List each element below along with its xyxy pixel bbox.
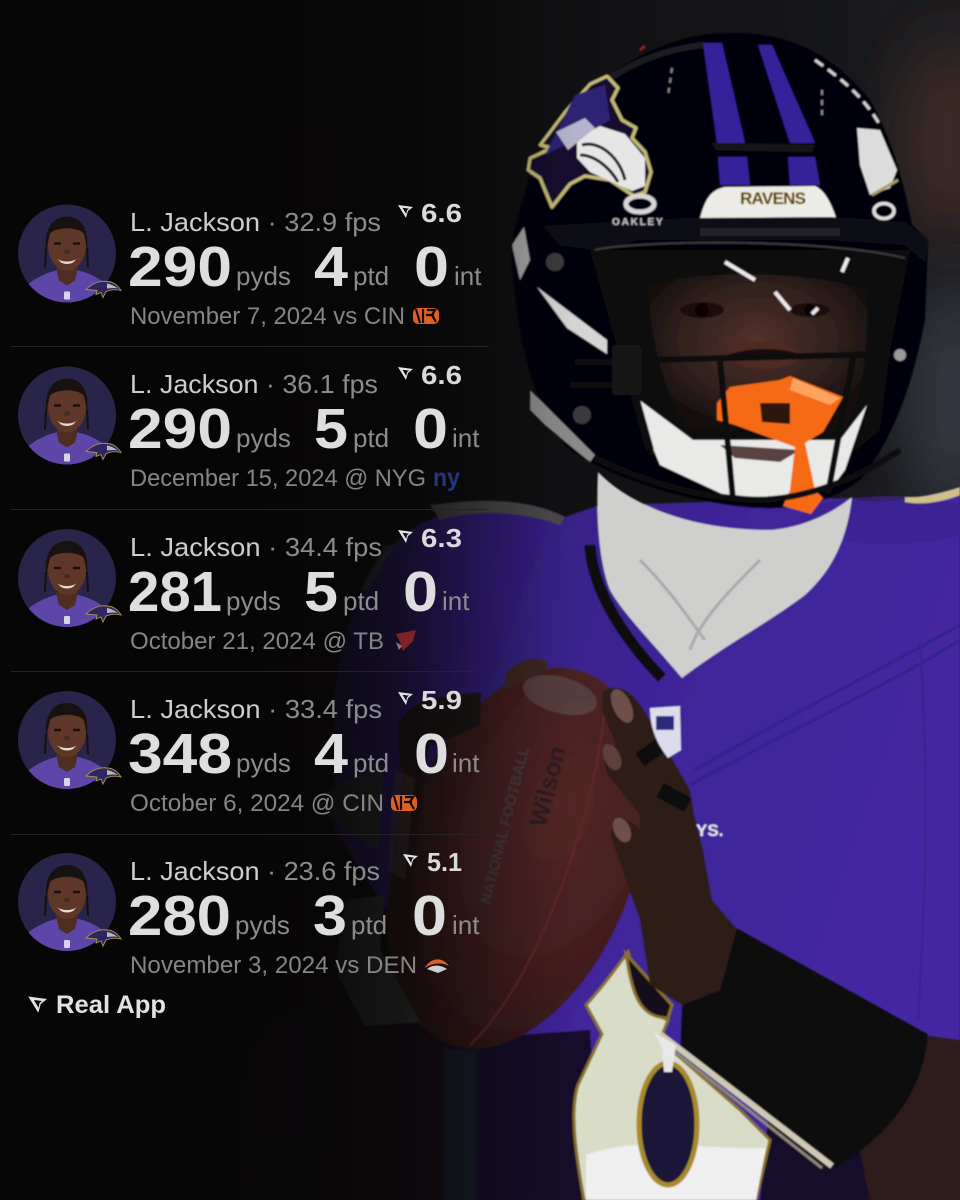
helmet stripes [703,43,820,185]
real score: 6.3 [421,523,462,553]
passing touchdowns [314,235,389,299]
jersey lettering: YS. [696,821,723,840]
real score: 5.1 [427,847,462,877]
RAVENS nameplate [700,186,836,218]
icon: bengals [413,308,439,324]
passing yards [128,722,291,786]
football [338,632,696,1084]
real score [398,523,462,553]
player line: L. Jackson · 33.4 fps [130,694,382,724]
passing yards: 290 [128,235,232,299]
mouthpiece [717,376,843,514]
football: Wilson [525,743,572,829]
icon: buccaneers [396,630,416,651]
game date: November 3, 2024 vs DEN [130,952,417,979]
real score: 5.9 [421,685,462,715]
game date: December 15, 2024 @ NYG [130,465,426,492]
jersey seams [360,487,960,1020]
passing touchdowns: 4 [314,722,348,786]
passing touchdowns: ptd [353,748,389,778]
player line: L. Jackson · 34.4 fps [130,532,382,562]
interceptions [412,884,480,948]
interceptions: 0 [403,560,438,624]
real score: 6.6 [421,360,462,390]
visor glare [725,258,848,314]
ravens helmet decal [528,76,898,207]
collar [590,545,662,678]
passing touchdowns [314,722,389,786]
facemask bars [570,354,900,500]
chin pad [630,393,867,500]
game date: November 7, 2024 vs CIN [130,303,405,330]
wristband and forearm [860,1035,960,1200]
real score: 6.6 [421,198,462,228]
eyes [680,302,830,369]
passing touchdowns [304,560,379,624]
jersey [335,488,960,1200]
interceptions: int [452,910,480,940]
row 1 [18,198,482,330]
interceptions: 0 [412,884,447,948]
avatar [18,204,121,302]
passing yards: pyds [226,586,281,616]
facemask top bar [543,217,928,262]
right hand [599,686,737,1005]
row 3 [18,523,470,655]
icon: broncos [425,959,449,973]
interceptions: int [454,261,482,291]
passing yards: pyds [235,910,290,940]
passing touchdowns: 5 [304,560,338,624]
mask hardware [546,253,906,424]
passing touchdowns: 4 [314,235,348,299]
passing yards [128,884,290,948]
avatar [18,529,121,627]
player line: L. Jackson · 36.1 fps [130,369,378,399]
passing yards: 280 [128,884,231,948]
avatar [18,366,121,464]
helmet shell [512,33,928,514]
passing yards [128,397,291,461]
NFL shield [650,706,681,758]
interceptions [414,722,480,786]
real score [398,360,462,390]
interceptions: int [442,586,470,616]
passing yards: 348 [128,722,232,786]
real score [398,198,462,228]
interceptions: int [452,748,480,778]
game date: October 21, 2024 @ TB [130,628,384,655]
passing yards [128,235,291,299]
passing touchdowns: ptd [343,586,379,616]
row 5 [18,847,480,979]
side padding [512,227,530,280]
interceptions [413,397,480,461]
brand name: Real App [56,991,166,1019]
oakley logos [612,196,894,228]
passing touchdowns [313,884,387,948]
row 2 [18,360,480,492]
passing touchdowns: 3 [313,884,347,948]
lower torso [444,1030,600,1200]
game date: October 6, 2024 @ CIN [130,790,384,817]
passing touchdowns: 5 [314,397,348,461]
gloves [309,765,384,850]
real score [403,847,462,877]
RAVENS nameplate: RAVENS [740,189,806,208]
oakley logos: OAKLEY [612,217,664,228]
passing yards: 281 [128,560,222,624]
passing touchdowns: ptd [353,423,389,453]
passing yards: pyds [236,423,291,453]
passing yards [128,560,281,624]
football: NATIONAL FOOTBALL [477,745,533,906]
jersey number 8 [574,952,770,1200]
interceptions: 0 [413,397,448,461]
interceptions [414,235,482,299]
icon: bengals [391,795,417,811]
left arm [240,998,445,1200]
player line: L. Jackson · 23.6 fps [130,856,380,886]
lace string [654,1032,832,1168]
interceptions: 0 [414,235,449,299]
real score [398,685,462,715]
avatar [18,691,121,789]
interceptions: int [452,423,480,453]
passing yards: pyds [236,261,291,291]
left hand [398,692,481,770]
passing touchdowns [314,397,389,461]
helmet highlights [590,45,705,95]
player line: L. Jackson · 32.9 fps [130,207,381,237]
icon: real logo [28,996,47,1013]
avatar [18,853,121,951]
passing touchdowns: ptd [351,910,387,940]
interceptions [403,560,470,624]
icon: giants: ny [433,464,460,492]
row 4 [18,685,480,817]
passing yards: pyds [236,748,291,778]
interceptions: 0 [414,722,449,786]
neck gaiter [597,472,852,678]
passing touchdowns: ptd [353,261,389,291]
real app brand [28,991,166,1019]
player photo [240,33,960,1200]
passing yards: 290 [128,397,232,461]
visor and face [590,250,910,455]
